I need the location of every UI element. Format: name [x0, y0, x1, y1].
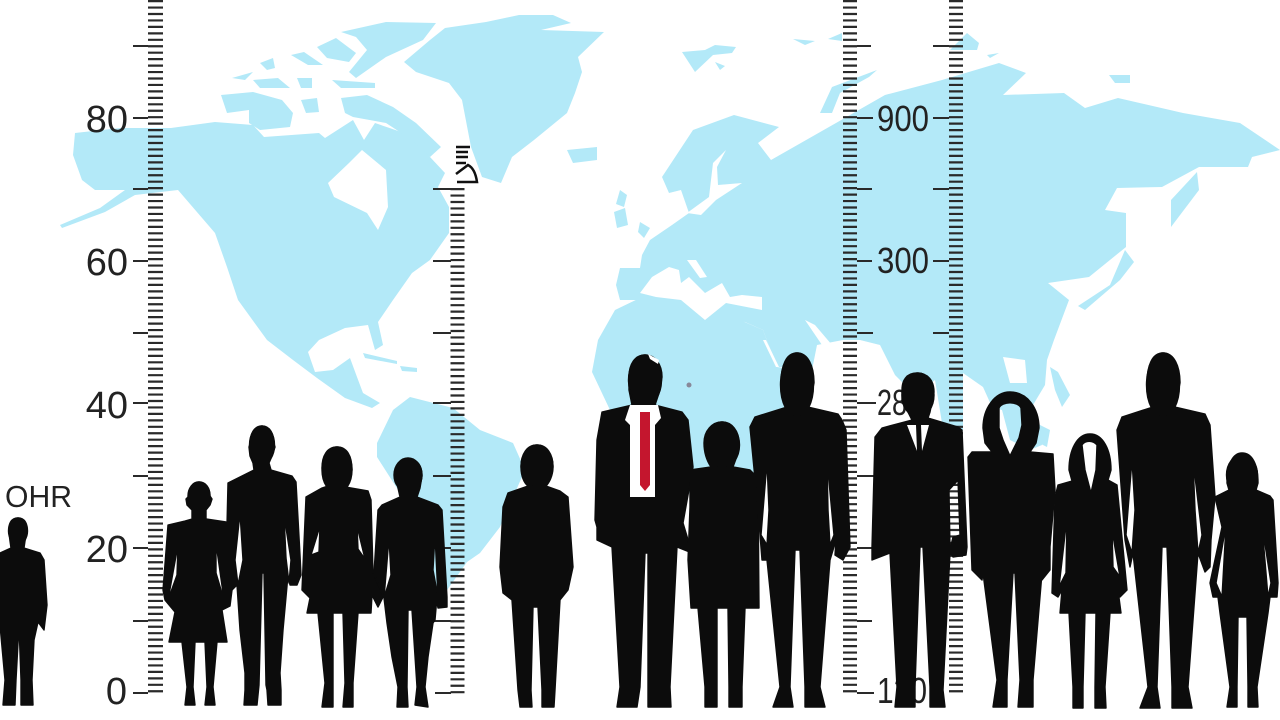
person: far left man: [0, 518, 47, 705]
map: arctic islands: [221, 22, 441, 157]
ruler: third: [850, 0, 873, 695]
person: tall man right: [1117, 353, 1215, 708]
map: japan and southeast asian islands: [1030, 250, 1134, 447]
person: tall man centre: [750, 353, 850, 707]
map: north america: [60, 120, 449, 408]
person: man in dark suit right: [872, 373, 967, 707]
person: small woman with bob: [1052, 434, 1127, 708]
axis labels: left: 0: [106, 671, 127, 713]
map: south america: [377, 397, 525, 600]
person: man in suit with red tie: [595, 354, 693, 707]
map: inland seas: [640, 150, 1027, 383]
tie: [640, 412, 650, 491]
ruler: left: [133, 0, 156, 695]
person: girl in dress: [163, 482, 232, 705]
shirt collar: [907, 425, 929, 451]
map: kamchatka: [1171, 172, 1199, 227]
silhouettes row: [0, 353, 1278, 708]
person: short hair figure: [374, 458, 447, 707]
person: small woman centre: [688, 422, 759, 707]
ruler: fourth: [860, 0, 956, 695]
map: european islands: [614, 190, 650, 238]
axis labels: right: 900: [877, 98, 929, 139]
ruler: squiggle at top of second ruler: [456, 147, 477, 182]
ruler: second: [433, 188, 458, 695]
label: OHR: OHR: [5, 479, 72, 514]
axis labels: left: 60: [86, 242, 128, 284]
shirt: [625, 405, 661, 497]
map: hudson bay: [328, 150, 388, 230]
map: eurasia: [616, 63, 1280, 460]
person: boy in jacket: [500, 445, 573, 707]
map: africa: [592, 298, 800, 520]
axis labels: left: 40: [86, 385, 128, 427]
axis labels: right: 120: [877, 670, 927, 711]
person: woman with long hair: [302, 447, 383, 707]
map: greenland: [404, 15, 604, 183]
world map: [60, 15, 1280, 600]
person: woman in trousers: [968, 392, 1055, 707]
axis labels: right: 28: [877, 382, 907, 423]
map: iceland: [567, 147, 597, 163]
axis labels: right: [877, 98, 929, 711]
map: central america islands: [363, 353, 417, 372]
person: small woman far right: [1210, 453, 1278, 707]
hair highlight: [648, 354, 659, 364]
axis labels: right: 300: [877, 240, 929, 281]
axis labels: left: 80: [86, 99, 128, 141]
axis labels: left: 20: [86, 529, 128, 571]
map marker dot: [686, 382, 692, 388]
person: tall man left: [226, 426, 301, 705]
map: arctic eurasian islands: [682, 33, 1130, 113]
axis labels: left: [86, 99, 128, 713]
